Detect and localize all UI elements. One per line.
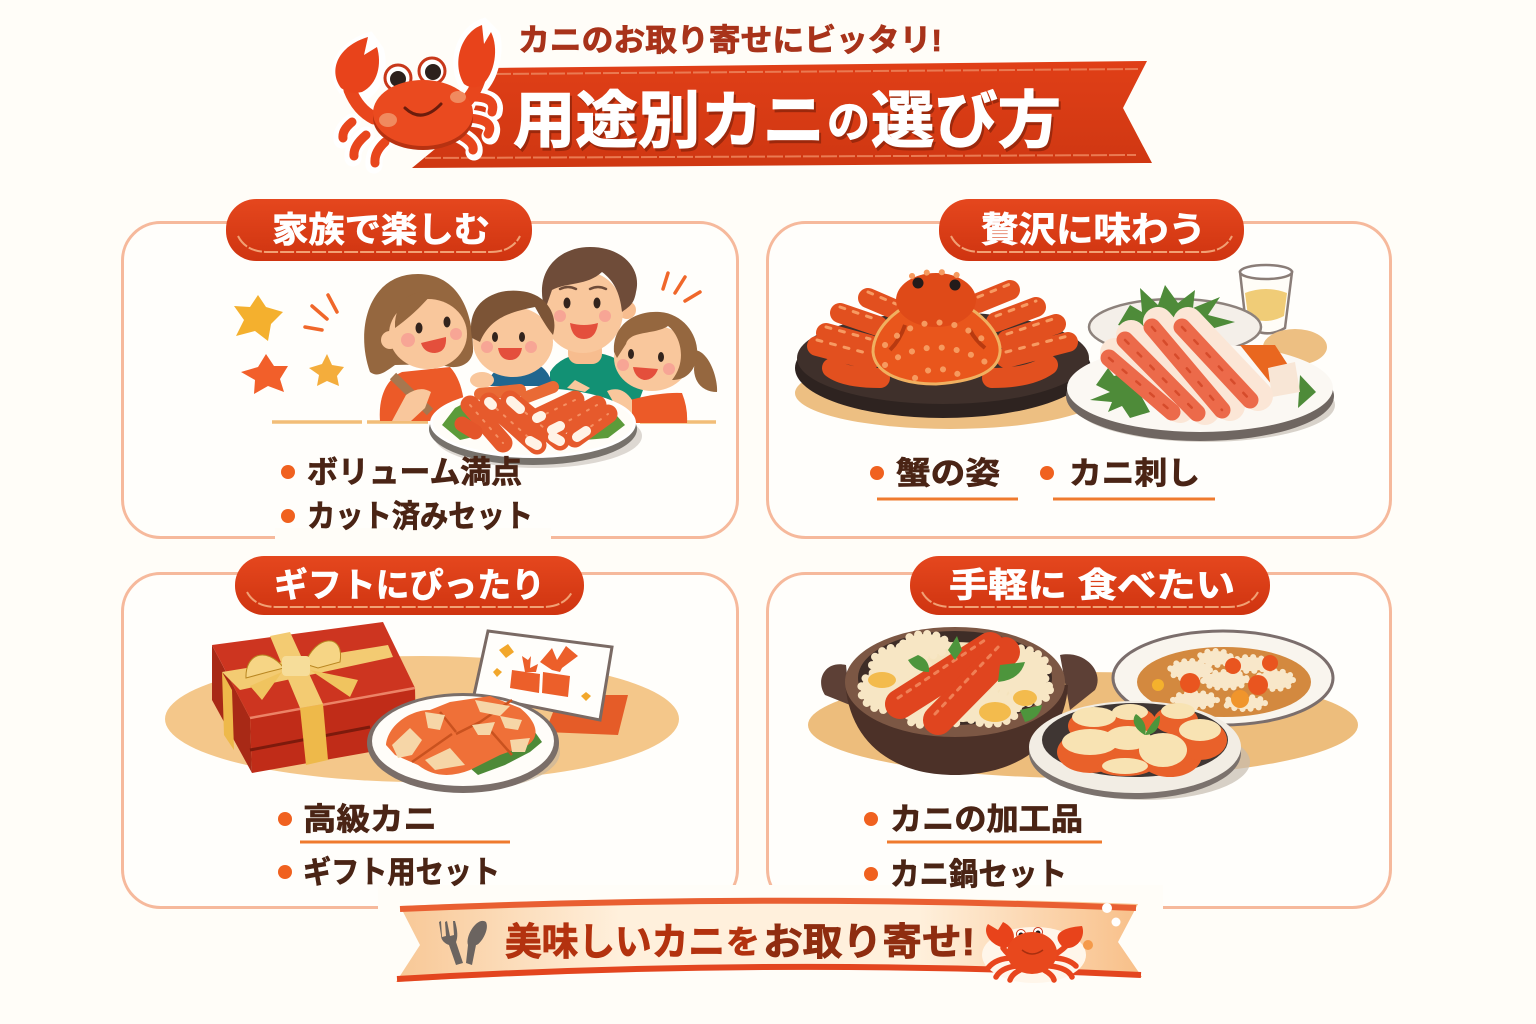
- icon: mascot crab: [335, 22, 497, 165]
- icon: stars and sparkle lines: [234, 273, 700, 394]
- title: 用途別カニ: [513, 87, 825, 156]
- banner text: 美味しいカニ: [505, 922, 725, 964]
- bullet list: family: カット済みセット: [307, 499, 533, 534]
- banner text: [505, 922, 975, 964]
- panel: luxury frame: [768, 222, 1390, 538]
- illustration: happy family: [364, 247, 717, 423]
- illustration: crab platter: [429, 387, 642, 468]
- heading pill: gift: [235, 556, 584, 615]
- banner text: お取り寄せ!: [763, 922, 975, 964]
- heading pill: luxury: 贅沢に味わう: [981, 211, 1206, 250]
- illustration: claypot with rice and crab: [821, 627, 1098, 775]
- panel: casual frame: [768, 574, 1390, 908]
- heading pill: luxury: [939, 199, 1244, 261]
- heading pill: family: 家族で楽しむ: [272, 211, 490, 250]
- decorative dots: [1083, 903, 1120, 950]
- illustration: gift plate: [367, 693, 560, 793]
- bullet list: luxury: 蟹の姿: [896, 456, 1000, 491]
- bullet list: gift: ギフト用セット: [303, 855, 500, 890]
- illustration: greeting card: [474, 631, 628, 735]
- bullet list: casual: [864, 802, 1102, 892]
- bullet list: gift: [278, 802, 510, 890]
- heading pill: family: [226, 199, 532, 261]
- panel: gift frame: [122, 574, 738, 908]
- heading pill: casual: 手軽に 食べたい: [949, 567, 1235, 605]
- heading pill: casual: [910, 556, 1270, 615]
- illustration: soup plate: [1113, 631, 1333, 725]
- bullet list: casual: カニの加工品: [890, 802, 1083, 837]
- banner text: を: [726, 924, 760, 960]
- illustration: crab gratin bowl: [1029, 701, 1250, 800]
- bottom banner: [396, 897, 1142, 982]
- mom: [364, 274, 473, 421]
- title: 選び方: [871, 87, 1061, 156]
- icon: small crab: [982, 922, 1086, 983]
- heading pill: gift: ギフトにぴったり: [274, 567, 545, 605]
- illustration: casual table mat: [808, 672, 1358, 778]
- subtitle: カニのお取り寄せにビッタリ!: [518, 23, 942, 58]
- bullet list: family: [281, 455, 533, 534]
- bullet list: luxury: [870, 456, 1215, 499]
- illustration: sashimi plate: [1066, 285, 1335, 442]
- bullet list: casual: カニ鍋セット: [890, 857, 1067, 892]
- boy: [470, 291, 554, 388]
- bullet list: luxury: カニ刺し: [1069, 456, 1200, 491]
- bullet list: gift: 高級カニ: [303, 802, 437, 837]
- panel: family frame: [122, 222, 738, 538]
- title: の: [827, 98, 870, 147]
- bullet list: family: ボリューム満点: [307, 455, 522, 490]
- illustration: shot glass: [1240, 265, 1292, 333]
- icon: fork and spoon: [439, 921, 487, 965]
- title: [513, 87, 1061, 156]
- illustration: gift table mat: [165, 656, 679, 782]
- illustration: whole crab on dark plate: [795, 272, 1105, 429]
- dad: [542, 247, 643, 420]
- illustration: gift box: [212, 622, 416, 773]
- table line: [272, 420, 716, 424]
- title ribbon: [412, 61, 1152, 168]
- girl: [567, 312, 717, 423]
